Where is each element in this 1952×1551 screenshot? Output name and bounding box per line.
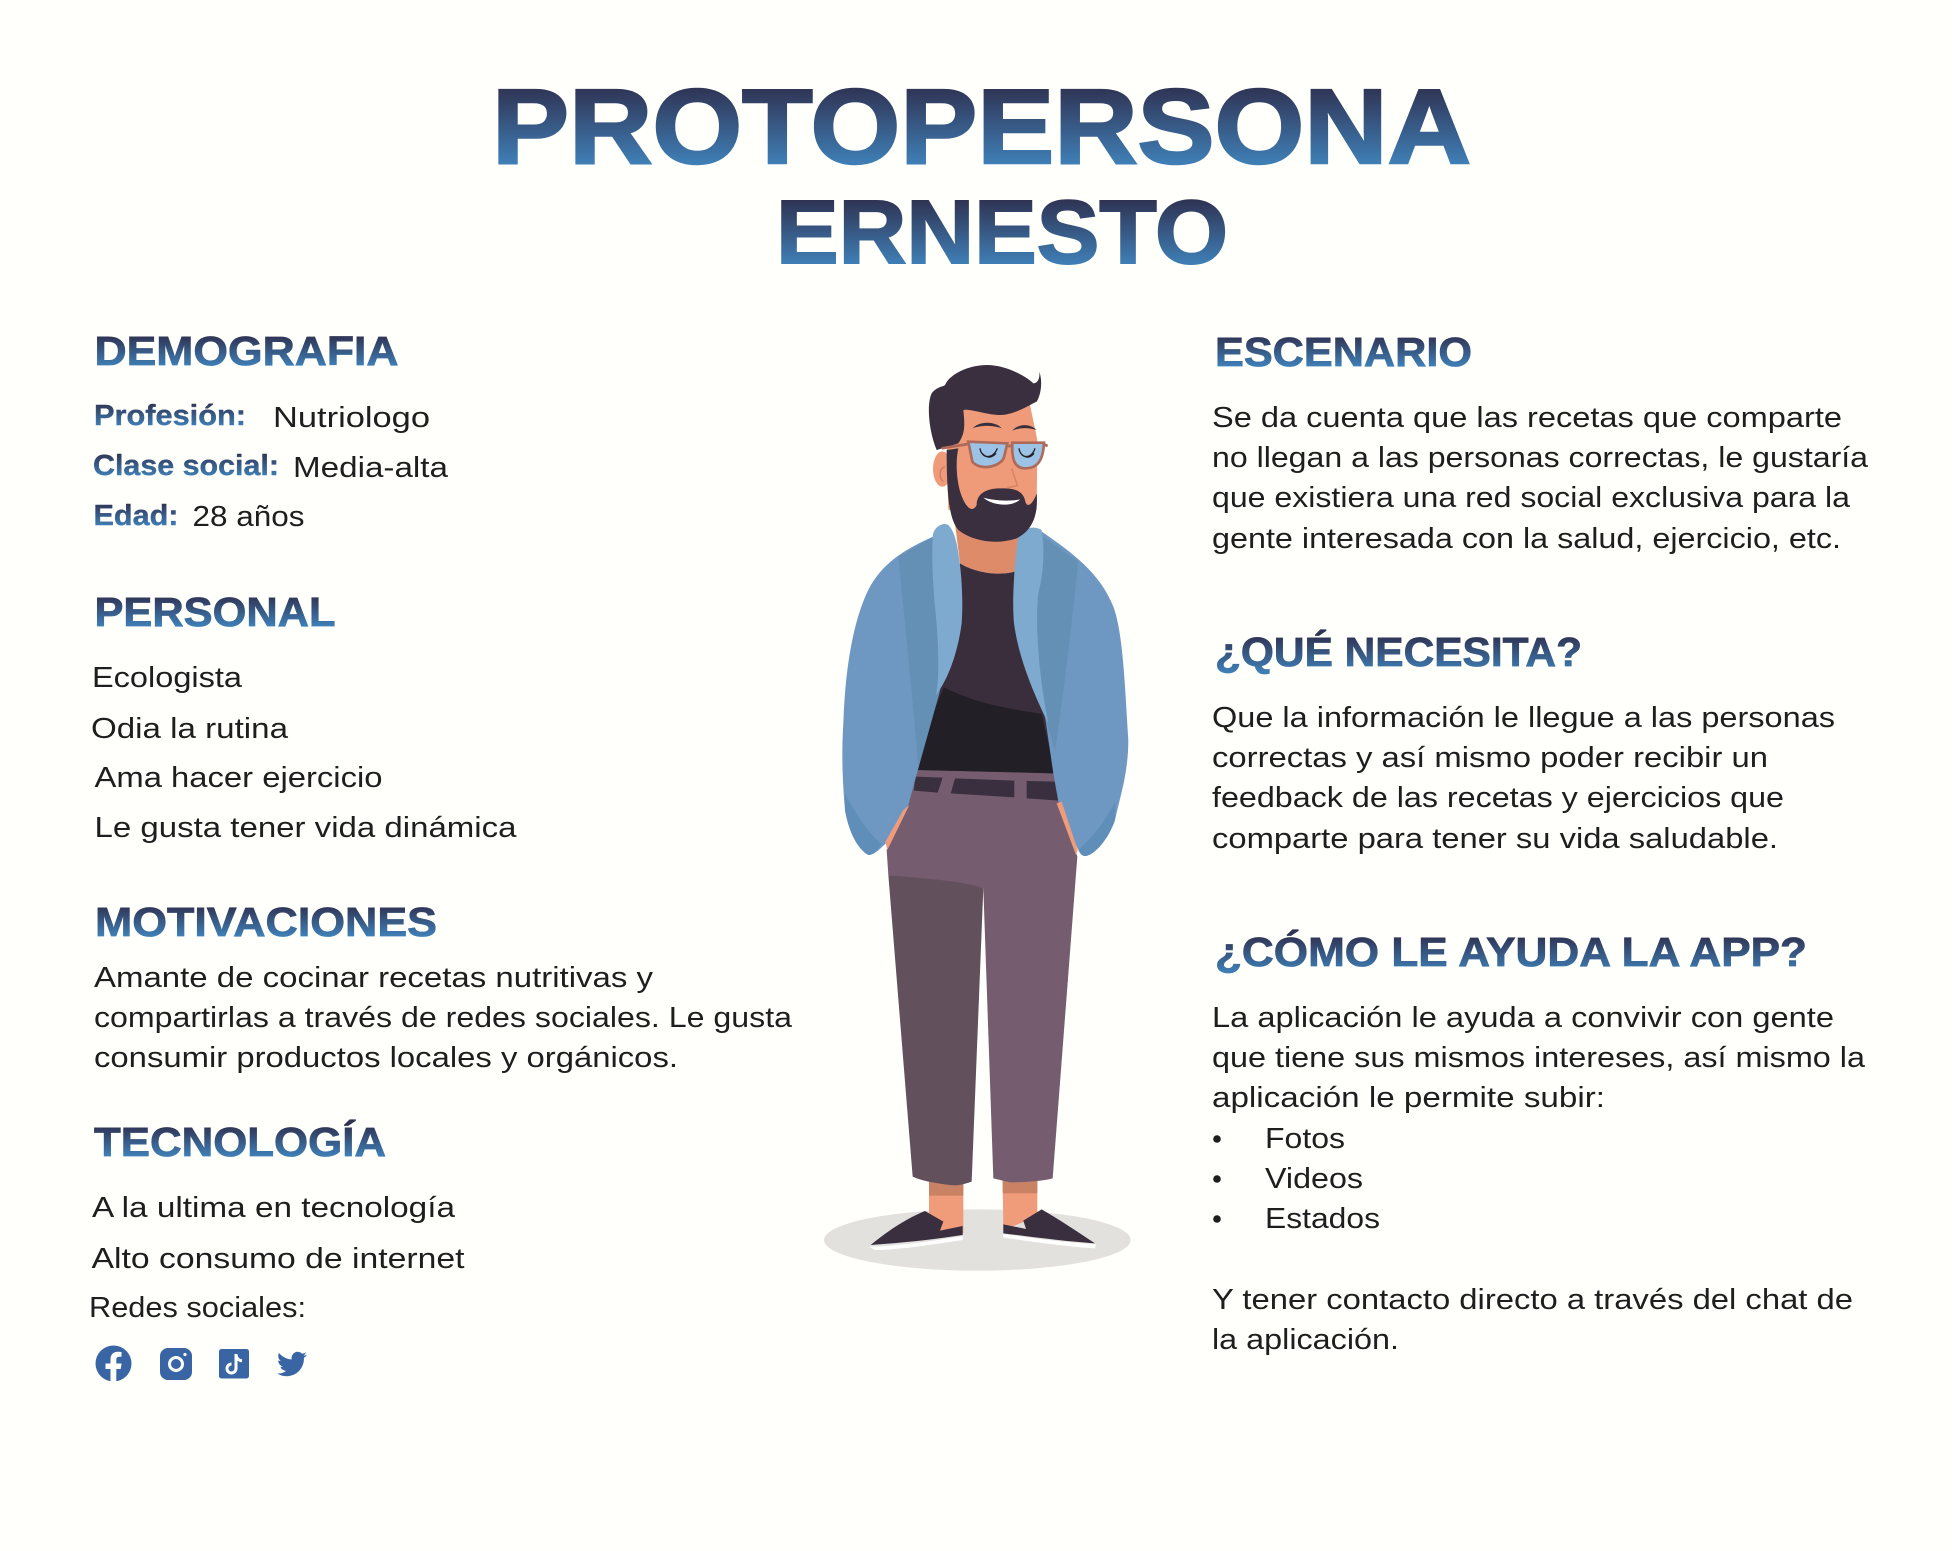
panel: tecnologia [89, 1119, 464, 1382]
panel: como le ayuda la app: La aplicación le ayuda a convivir con gente [1212, 1002, 1834, 1034]
panel: escenario [1212, 329, 1869, 555]
icon: instagram [160, 1348, 192, 1380]
panel: como le ayuda la app [1212, 929, 1866, 1356]
trousers [887, 768, 1077, 1185]
panel: escenario: que existiera una red social exclusiva para la [1212, 482, 1851, 514]
panel: como le ayuda la app: Videos [1265, 1163, 1363, 1195]
panel: tecnologia: Alto consumo de internet [92, 1243, 464, 1275]
shirt [917, 563, 1055, 773]
panel: como le ayuda la app: Fotos [1265, 1123, 1345, 1155]
panel: que necesita: correctas y así mismo poder recibir un [1212, 742, 1768, 774]
ankles and shoes [869, 1178, 1096, 1250]
panel: tecnologia: Redes sociales: [89, 1292, 306, 1324]
panel: motivaciones: Amante de cocinar recetas nutritivas y [94, 962, 654, 994]
panel: escenario: gente interesada con la salud, ejercicio, etc. [1212, 523, 1841, 555]
panel: demografia: DEMOGRAFIA [94, 328, 398, 374]
panel: que necesita: ¿QUÉ NECESITA? [1215, 629, 1582, 675]
neck [955, 523, 1019, 574]
panel: demografia: 28 años [192, 501, 304, 533]
hands in pockets [885, 802, 1078, 855]
panel: demografia: Profesión: [94, 400, 246, 432]
panel: escenario: no llegan a las personas correctas, le gustaría [1212, 442, 1869, 474]
panel: como le ayuda la app: la aplicación. [1212, 1324, 1399, 1356]
icon: twitter [277, 1352, 307, 1376]
panel: como le ayuda la app: Y tener contacto directo a través del chat de [1212, 1284, 1853, 1316]
panel: motivaciones: consumir productos locales y orgánicos. [94, 1042, 678, 1074]
panel: personal [91, 589, 517, 844]
ground shadow [824, 1209, 1131, 1271]
panel: demografia: Media-alta [293, 452, 449, 484]
panel: personal: Ecologista [92, 662, 243, 694]
icon: facebook [96, 1346, 132, 1382]
panel: motivaciones: compartirlas a través de redes sociales. Le gusta [94, 1002, 793, 1034]
panel: tecnologia: TECNOLOGÍA [94, 1119, 386, 1165]
title: ERNESTO [776, 183, 1228, 283]
panel: como le ayuda la app: aplicación le permite subir: [1212, 1082, 1605, 1114]
panel: personal: Odia la rutina [91, 713, 289, 745]
panel: tecnologia: A la ultima en tecnología [92, 1192, 456, 1224]
panel: personal: PERSONAL [94, 589, 336, 635]
icon: tiktok [219, 1349, 249, 1378]
panel: como le ayuda la app: Estados [1265, 1203, 1380, 1235]
illustration: man standing [824, 365, 1131, 1271]
panel: que necesita: feedback de las recetas y ejercicios que [1212, 782, 1784, 814]
panel: personal: Le gusta tener vida dinámica [94, 812, 517, 844]
panel: que necesita: comparte para tener su vida saludable. [1212, 823, 1778, 855]
panel: motivaciones [94, 899, 793, 1074]
panel: que necesita: Que la información le llegue a las personas [1212, 702, 1835, 734]
head [929, 365, 1041, 542]
glasses [942, 442, 1048, 468]
panel: como le ayuda la app: que tiene sus mismos intereses, así mismo la [1212, 1042, 1866, 1074]
panel: demografia: Edad: [94, 500, 178, 532]
panel: demografia [93, 328, 449, 533]
title: PROTOPERSONA [492, 68, 1471, 186]
panel: escenario: ESCENARIO [1215, 329, 1472, 375]
panel: como le ayuda la app: ¿CÓMO LE AYUDA LA APP? [1215, 929, 1807, 975]
jacket right side [1013, 528, 1128, 856]
jacket left side [842, 524, 962, 855]
title [492, 68, 1471, 283]
panel: demografia: Nutriologo [273, 402, 430, 434]
panel: escenario: Se da cuenta que las recetas que comparte [1212, 402, 1842, 434]
panel: motivaciones: MOTIVACIONES [95, 899, 437, 945]
panel: demografia: Clase social: [93, 450, 279, 482]
panel: que necesita [1212, 629, 1835, 855]
panel: personal: Ama hacer ejercicio [94, 762, 382, 794]
